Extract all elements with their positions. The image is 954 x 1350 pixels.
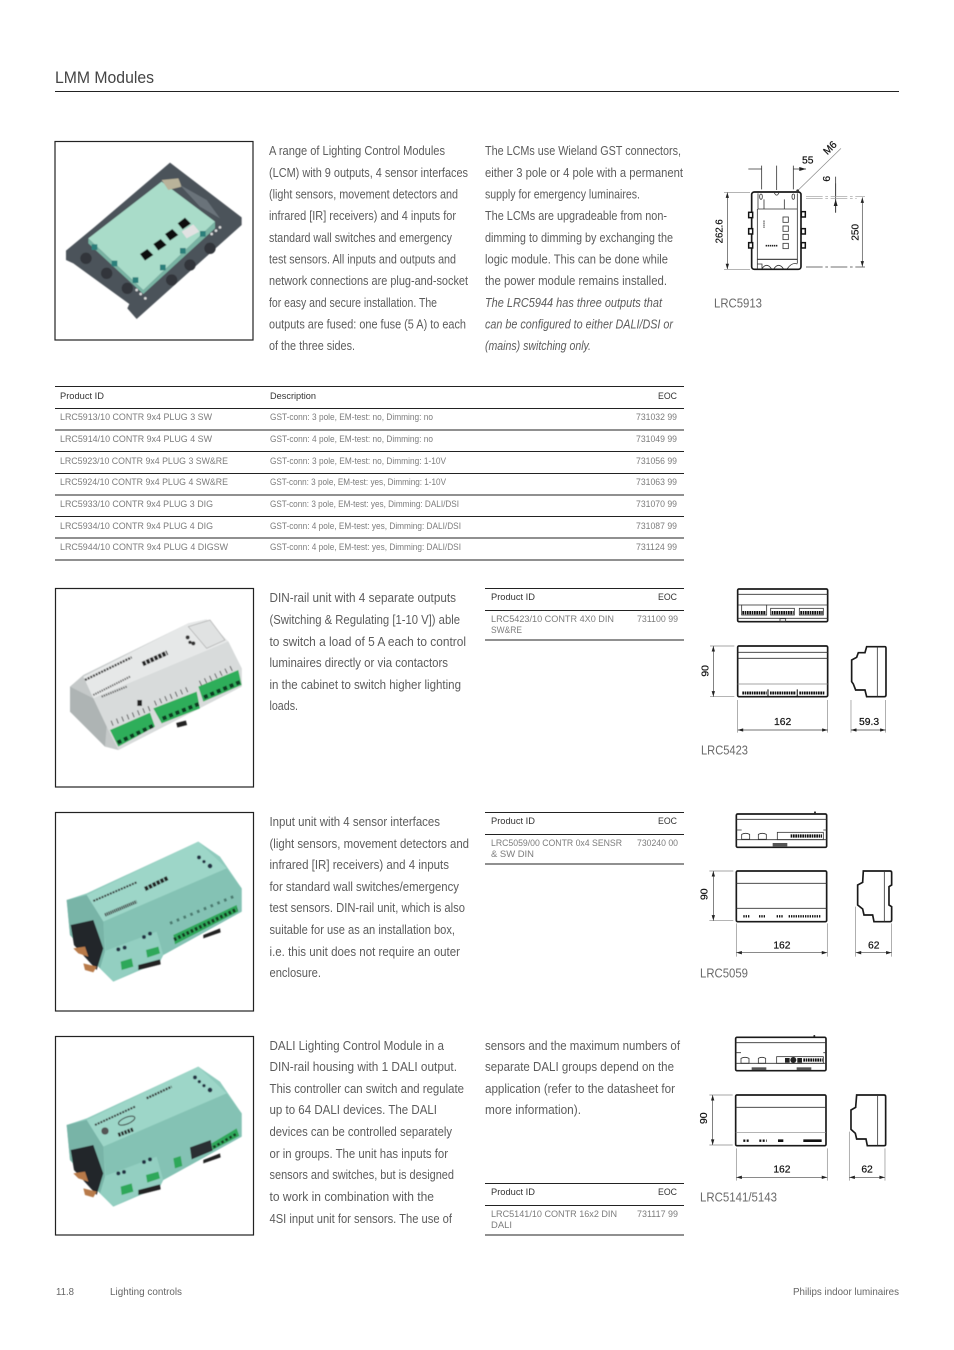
text block: LCM intro, column 2: either 3 pole or 4 pole with a permanent	[485, 166, 683, 180]
table: LCM product list: GST-conn: 3 pole, EM-test: yes, Dimming: 1-10V	[270, 477, 447, 488]
dimension drawing LRC5913: 250	[850, 224, 861, 241]
text block: LRC5059 description: suitable for use as an installation box,	[270, 923, 455, 937]
dimension drawing LRC5141/5143: 90	[699, 1112, 710, 1124]
text block: LRC5141 description, column 1: DALI Lighting Control Module in a	[270, 1039, 444, 1053]
text block: LRC5423 description: loads.	[270, 699, 298, 713]
text block: LRC5059 description: infrared [IR] receivers) and 4 inputs	[270, 858, 449, 872]
text block: LCM intro, column 2: (mains) switching only.	[485, 339, 591, 353]
table: LCM product list: 731087 99	[636, 521, 677, 532]
footer: publication: Philips indoor luminaires	[793, 1286, 899, 1298]
text block: LRC5141 description, column 1: to work in combination with the	[270, 1190, 434, 1204]
text block: LCM intro, column 1: standard wall switches and emergency	[269, 231, 453, 245]
table: LCM product list: LRC5934/10 CONTR 9x4 PLUG 4 DIG	[60, 521, 213, 532]
text block: LCM intro, column 2: dimming to dimming by exchanging the	[485, 231, 673, 245]
text block: LRC5059 description: for standard wall switches/emergency	[270, 880, 460, 894]
text block: LCM intro, column 1: (light sensors, movement detectors and	[269, 188, 458, 202]
table: LRC5059: & SW DIN	[491, 849, 534, 860]
dimension drawing LRC5141/5143	[699, 1035, 886, 1181]
text block: LRC5141 description, column 1: up to 64 DALI devices. The DALI	[270, 1103, 437, 1117]
text block: LCM intro, column 2: the power module remains installed.	[485, 274, 667, 288]
table: LRC5141: 731117 99	[637, 1209, 678, 1220]
table: LCM product list: LRC5913/10 CONTR 9x4 PLUG 3 SW	[60, 412, 212, 423]
table: LCM product list: Description	[270, 391, 316, 402]
table: LRC5059: LRC5059/00 CONTR 0x4 SENSR	[491, 838, 622, 849]
table: LCM product list: 731063 99	[636, 477, 677, 488]
text block: LCM intro, column 1: outputs are fused: one fuse (5 A) to each	[269, 318, 466, 332]
text block: LCM intro, column 1: A range of Lighting Control Modules	[269, 144, 445, 158]
dimension drawing LRC5141/5143: 62	[861, 1165, 873, 1176]
panel: product photo LRC5913	[55, 142, 253, 340]
table: LRC5141: EOC	[658, 1187, 677, 1198]
text block: LRC5423 description: DIN-rail unit with 4 separate outputs	[270, 591, 456, 605]
table: LRC5141	[485, 1184, 684, 1235]
label: LRC5059: LRC5059	[700, 966, 748, 980]
text block: LRC5141 description, column 2: separate DALI groups depend on the	[485, 1060, 674, 1074]
table: LRC5423: LRC5423/10 CONTR 4X0 DIN	[491, 614, 614, 625]
table: LCM product list: GST-conn: 3 pole, EM-test: yes, Dimming: DALI/DSI	[270, 499, 459, 510]
text block: LRC5141 description, column 1: sensors and switches, but is designed	[270, 1168, 454, 1182]
text block: LCM intro, column 1: (LCM) with 9 outputs, 4 sensor interfaces	[269, 166, 468, 180]
text block: LRC5423 description	[270, 591, 466, 713]
dimension drawing LRC5423: 162	[774, 717, 791, 728]
table: LRC5141: LRC5141/10 CONTR 16x2 DIN	[491, 1209, 617, 1220]
text block: LCM intro, column 1: for easy and secure installation. The	[269, 296, 437, 310]
dimension drawing LRC5913	[715, 139, 865, 269]
text block: LRC5141 description, column 2: more information).	[485, 1103, 581, 1117]
text block: LRC5423 description: to switch a load of 5 A each to control	[270, 635, 466, 649]
dimension drawing LRC5423: 59.3	[859, 717, 879, 728]
table: LCM product list: 731056 99	[636, 456, 677, 467]
text block: LRC5141 description, column 1: or in groups. The unit has inputs for	[270, 1147, 448, 1161]
dimension drawing LRC5913: M6	[822, 139, 840, 157]
text block: LRC5141 description, column 1: DIN-rail housing with 1 DALI output.	[270, 1060, 457, 1074]
table: LCM product list: GST-conn: 4 pole, EM-test: no, Dimming: no	[270, 434, 433, 445]
table: LRC5059: 730240 00	[637, 838, 678, 849]
table: LRC5423	[485, 588, 684, 640]
dimension drawing LRC5913: 55	[802, 155, 814, 166]
text block: LRC5059 description	[270, 815, 469, 980]
panel: product photo LRC5141/5143	[56, 1036, 254, 1235]
text block: LRC5141 description, column 2: application (refer to the datasheet for	[485, 1082, 675, 1096]
dimension drawing LRC5141/5143: 162	[773, 1165, 791, 1176]
text block: LCM intro, column 1: network connections are plug-and-socket	[269, 274, 468, 288]
text block: LCM intro, column 1: infrared [IR] receivers) and 4 inputs for	[269, 209, 456, 223]
text block: LRC5059 description: Input unit with 4 sensor interfaces	[270, 815, 440, 829]
table: LRC5423: EOC	[658, 592, 677, 603]
label: LRC5141/5143: LRC5141/5143	[700, 1190, 777, 1204]
text block: LRC5059 description: test sensors. DIN-rail unit, which is also	[270, 901, 465, 915]
text block: LRC5141 description, column 1: 4SI input unit for sensors. The use of	[270, 1212, 452, 1226]
dimension drawing LRC5913: 262.6	[715, 219, 726, 243]
footer: section: Lighting controls	[110, 1286, 182, 1298]
text block: LCM intro, column 2	[485, 144, 683, 353]
table: LRC5423: Product ID	[491, 592, 535, 603]
text block: LCM intro, column 1: test sensors. All inputs and outputs and	[269, 252, 456, 266]
dimension drawing LRC5059: 162	[773, 940, 791, 951]
dimension drawing LRC5059: 62	[868, 940, 880, 951]
table: LRC5059: EOC	[658, 816, 677, 827]
dimension drawing LRC5059	[700, 811, 892, 957]
text block: LRC5059 description: i.e. this unit does not require an outer	[270, 945, 460, 959]
text block: LCM intro, column 2: can be configured to either DALI/DSI or	[485, 318, 674, 332]
dimension drawing LRC5913: 6	[822, 176, 833, 182]
dimension drawing LRC5059: 90	[700, 888, 711, 900]
table: LCM product list	[55, 386, 684, 560]
table: LCM product list: GST-conn: 3 pole, EM-test: no, Dimming: no	[270, 412, 433, 423]
dimension drawing LRC5423: 90	[700, 665, 711, 677]
table: LRC5423: SW&RE	[491, 625, 522, 636]
label: LRC5913: LRC5913	[714, 296, 762, 310]
panel: product photo LRC5059	[56, 812, 254, 1011]
text block: LRC5141 description, column 1: devices can be controlled separately	[270, 1125, 453, 1139]
table: LRC5059: Product ID	[491, 816, 535, 827]
text block: LRC5423 description: (Switching & Regulating [1-10 V]) able	[270, 613, 460, 627]
table: LCM product list: GST-conn: 3 pole, EM-test: no, Dimming: 1-10V	[270, 456, 447, 467]
table: LCM product list: GST-conn: 4 pole, EM-test: yes, Dimming: DALI/DSI	[270, 521, 461, 532]
table: LCM product list: LRC5924/10 CONTR 9x4 PLUG 4 SW&RE	[60, 477, 228, 488]
table: LCM product list: LRC5944/10 CONTR 9x4 PLUG 4 DIGSW	[60, 542, 228, 553]
text block: LCM intro, column 2: The LRC5944 has three outputs that	[485, 296, 662, 310]
table: LRC5141: Product ID	[491, 1187, 535, 1198]
label: LRC5423: LRC5423	[701, 742, 748, 758]
table: LCM product list: 731032 99	[636, 412, 677, 423]
text block: LCM intro, column 1	[269, 144, 468, 353]
table: LCM product list: LRC5914/10 CONTR 9x4 PLUG 4 SW	[60, 434, 212, 445]
text block: LCM intro, column 2: logic module. This can be done while	[485, 252, 668, 266]
text block: LRC5423 description: luminaires directly or via contactors	[270, 656, 448, 670]
text block: LRC5059 description: enclosure.	[270, 966, 321, 980]
text block: LCM intro, column 1: of the three sides.	[269, 339, 355, 353]
text block: LCM intro, column 2: The LCMs are upgradeable from non-	[485, 209, 667, 223]
table: LCM product list: LRC5933/10 CONTR 9x4 PLUG 3 DIG	[60, 499, 213, 510]
table: LCM product list: GST-conn: 4 pole, EM-test: yes, Dimming: DALI/DSI	[270, 542, 461, 553]
panel: product photo LRC5423	[56, 588, 254, 787]
text block: LRC5141 description, column 1	[270, 1039, 464, 1226]
table: LCM product list: Product ID	[60, 391, 104, 402]
dimension drawing LRC5423	[700, 589, 886, 733]
text block: LRC5141 description, column 1: This controller can switch and regulate	[270, 1082, 464, 1096]
text block: LRC5423 description: in the cabinet to switch higher lighting	[270, 678, 461, 692]
text block: LRC5059 description: (light sensors, movement detectors and	[270, 837, 469, 851]
page title: LMM Modules	[55, 68, 154, 87]
table: LRC5141: DALI	[491, 1220, 512, 1231]
table: LCM product list: 731124 99	[636, 542, 677, 553]
text block: LCM intro, column 2: supply for emergency luminaires.	[485, 188, 640, 202]
table: LCM product list: 731070 99	[636, 499, 677, 510]
text block: LRC5141 description, column 2: sensors and the maximum numbers of	[485, 1039, 680, 1053]
table: LRC5423: 731100 99	[637, 614, 678, 625]
table: LCM product list: 731049 99	[636, 434, 677, 445]
text block: LCM intro, column 2: The LCMs use Wieland GST connectors,	[485, 144, 681, 158]
table: LCM product list: EOC	[658, 391, 677, 402]
text block: LRC5141 description, column 2	[485, 1039, 680, 1117]
footer: page number: 11.8	[56, 1286, 74, 1298]
table: LRC5059	[485, 812, 684, 864]
table: LCM product list: LRC5923/10 CONTR 9x4 PLUG 3 SW&RE	[60, 456, 228, 467]
